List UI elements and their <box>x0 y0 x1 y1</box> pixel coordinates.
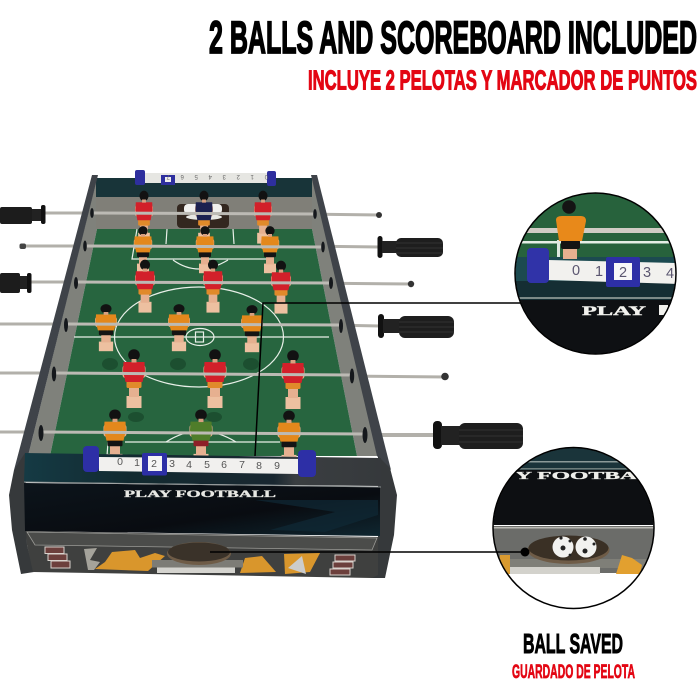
ball saved label: BALL SAVED <box>523 628 623 659</box>
ball pocket <box>528 536 610 564</box>
row 5: red team <box>122 349 304 409</box>
scoreboard digits: 9 <box>274 460 280 472</box>
row 6: orange team and green goalkeeper <box>104 409 300 466</box>
scoreboard digits: 0 <box>117 456 123 468</box>
far scoreboard <box>135 170 276 186</box>
left corner post <box>9 453 34 574</box>
row 4: orange team <box>95 304 263 352</box>
row 1: red team <box>135 191 272 244</box>
zoom callout: scoreboard: 3 <box>643 265 651 281</box>
ball slot <box>152 542 243 568</box>
zoom callout: ball storage <box>490 445 660 614</box>
goal <box>177 204 229 228</box>
zoom callout: scoreboard: 2 <box>619 265 627 281</box>
row 3: red team <box>135 260 291 314</box>
far band <box>96 178 312 197</box>
scoreboard digits: 5 <box>204 459 210 471</box>
far wall <box>96 195 312 229</box>
leader line: ball storage <box>210 548 530 556</box>
left rod ends and handles <box>0 205 100 432</box>
leader line: scoreboard <box>255 303 520 456</box>
playing field <box>50 229 357 456</box>
scoreboard digits <box>117 456 280 472</box>
scoreboard digits: 6 <box>221 459 227 471</box>
scoreboard digits: 3 <box>169 458 175 470</box>
scoreboard digits: 8 <box>256 460 262 472</box>
scoreboard close-up <box>548 260 678 284</box>
scoreboard <box>83 446 316 477</box>
playing rods <box>41 213 365 434</box>
soccer ball one <box>552 536 574 558</box>
front lower panel <box>26 531 378 578</box>
zoom callout: ball storage: Y FOOTBA <box>515 471 639 482</box>
rod bearings <box>38 208 368 443</box>
scoreboard digits: 1 <box>134 457 140 469</box>
zoom callout: scoreboard: 1 <box>595 264 603 280</box>
scoreboard digits: 7 <box>239 459 245 471</box>
right blue end cap <box>298 450 316 477</box>
soccer ball two <box>576 536 596 558</box>
right rod ends and handles <box>300 212 523 449</box>
side rails <box>14 175 98 470</box>
scoreboard digits: 4 <box>186 459 192 471</box>
front black panel <box>24 482 381 536</box>
far scoreboard: 0 1 2 3 4 5 6 7 <box>162 173 268 179</box>
row 2: orange team <box>134 226 279 273</box>
zoom callout: scoreboard: 0 <box>572 263 580 279</box>
zoom callout: scoreboard: 4 <box>666 266 674 282</box>
zoom callout: scoreboard <box>510 190 680 360</box>
PLAY FOOTBALL text: PLAY FOOTBALL <box>124 489 276 499</box>
score slider <box>142 453 167 476</box>
score slider: 2 <box>151 458 157 470</box>
brick decoration right <box>330 555 355 575</box>
player figure <box>556 200 586 259</box>
foosball table <box>0 170 523 578</box>
right corner post <box>372 456 397 578</box>
table side walls <box>28 178 97 456</box>
near top band <box>24 453 381 486</box>
left blue end cap <box>83 446 99 472</box>
zoom callout: scoreboard: PLAY <box>582 303 647 318</box>
brick decoration left <box>45 547 70 568</box>
graffiti art <box>84 548 320 574</box>
player shadows <box>102 358 259 422</box>
